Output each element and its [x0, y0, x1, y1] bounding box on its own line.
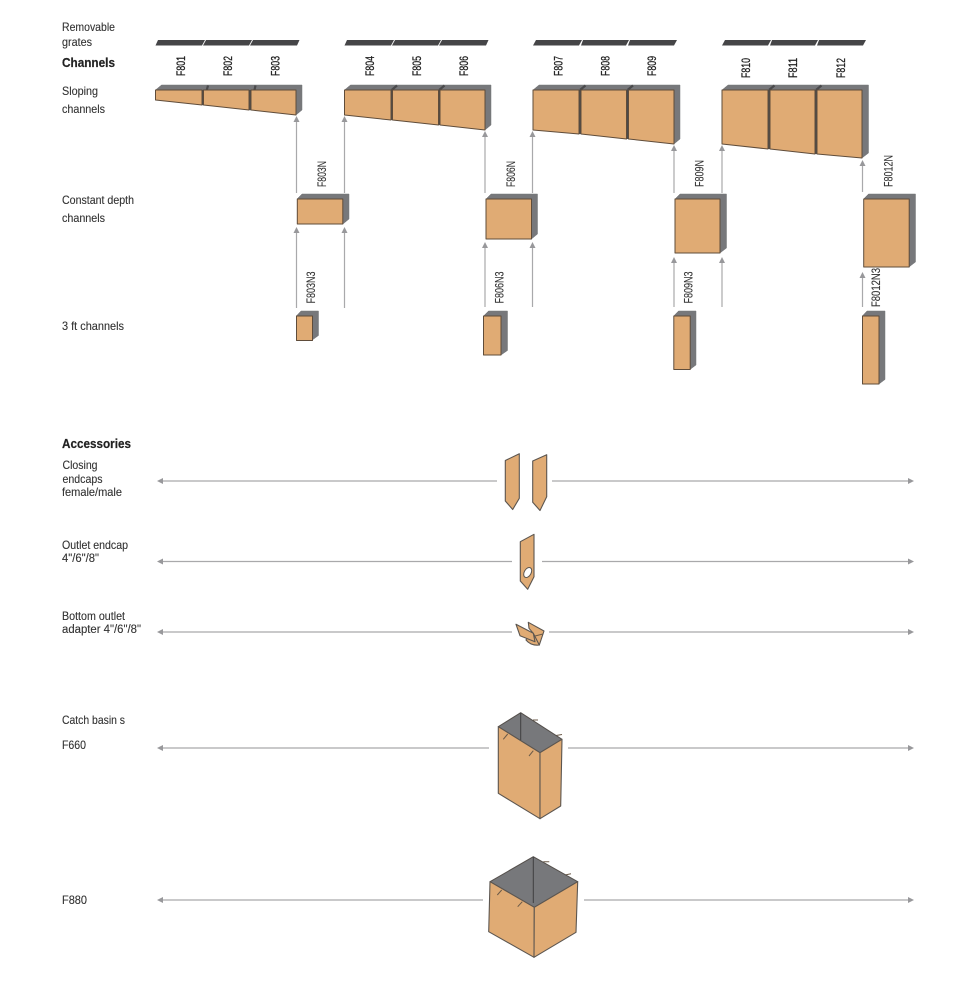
constant depth channel: F8012N: [864, 194, 916, 267]
model labels: F810 to F812: F811: [786, 58, 800, 78]
row label: sloping channels: Sloping: [62, 84, 98, 98]
row label: 3 ft channels: 3 ft channels: [62, 319, 124, 333]
model labels: F810 to F812: F810: [739, 58, 753, 78]
3 ft channel: F8012N3: [862, 311, 885, 384]
arrows: catch basin F660: [157, 745, 914, 751]
model labels: F804 to F806: F804: [363, 56, 377, 76]
label: F803N3: F803N3: [304, 271, 318, 304]
row label: outlet endcap: [62, 538, 128, 565]
label: F8012N: F8012N: [882, 155, 896, 187]
constant depth channel: F803N: [297, 194, 349, 224]
grates: F801 to F803: [156, 40, 300, 46]
sloping channels: F801 to F803: [156, 85, 302, 115]
label: F803N: F803N: [315, 161, 329, 187]
arrows: outlet endcap: [157, 558, 914, 564]
row label: removable grates: [62, 20, 115, 49]
heading: channels: Channels: [62, 55, 115, 70]
icon: outlet endcap: [520, 534, 534, 589]
row label: sloping channels: channels: [62, 102, 105, 116]
label: F809N3: F809N3: [682, 271, 696, 304]
row label: catch basins: Catch basin s: [62, 713, 125, 727]
row label: closing endcaps female/male: [62, 458, 122, 499]
model labels: F801 to F803: [174, 56, 282, 76]
icon: bottom outlet adapter: [516, 622, 544, 645]
icon: catch basin F660: [498, 713, 562, 819]
constant depth channel: F806N: [486, 194, 538, 239]
row label: closing endcaps female/male: Closing: [62, 458, 98, 472]
model labels: F801 to F803: F802: [221, 56, 235, 76]
arrows: sloping to constant depth: [294, 116, 866, 193]
constant depth channel: F809N: [675, 194, 726, 253]
grates: F807 to F809: [533, 40, 677, 46]
sloping channels: F804 to F806: [344, 85, 491, 130]
icon: closing endcaps: [505, 454, 547, 510]
model labels: F807 to F809: [552, 56, 659, 76]
3 ft channel: F803N3: [296, 311, 318, 340]
row label: constant depth channels: channels: [62, 211, 105, 225]
model labels: F810 to F812: F812: [834, 58, 848, 78]
model labels: F804 to F806: [363, 56, 471, 76]
grates: F804 to F806: [344, 40, 488, 46]
label: F8012N3: F8012N3: [869, 268, 883, 307]
3 ft channel: F806N3: [484, 311, 508, 355]
arrows: closing endcaps: [157, 478, 914, 484]
row label: removable grates: Removable: [62, 20, 115, 34]
grates: F810 to F812: [722, 40, 866, 46]
model labels: F807 to F809: F808: [598, 56, 612, 76]
row label: bottom outlet adapter: [62, 609, 141, 636]
row label: outlet endcap: Outlet endcap: [62, 538, 128, 552]
model labels: F804 to F806: F806: [457, 56, 471, 76]
label: F806N: F806N: [504, 161, 518, 187]
label: F809N: F809N: [692, 160, 706, 187]
row label: bottom outlet adapter: adapter 4"/6"/8": [62, 624, 141, 636]
row label: F660: F660: [62, 738, 86, 752]
row label: outlet endcap: 4"/6"/8": [62, 553, 99, 565]
model labels: F807 to F809: F807: [552, 56, 566, 76]
model labels: F807 to F809: F809: [645, 56, 659, 76]
arrows: bottom outlet adapter: [157, 629, 914, 635]
row label: closing endcaps female/male: female/male: [62, 485, 122, 499]
arrows: constant depth to 3 ft: [294, 227, 866, 308]
row label: F880: F880: [62, 893, 87, 907]
sloping channels: F810 to F812: [722, 85, 868, 158]
label: F806N3: F806N3: [492, 271, 506, 304]
model labels: F804 to F806: F805: [410, 56, 424, 76]
row label: constant depth channels: [62, 193, 134, 225]
3 ft channel: F809N3: [674, 311, 696, 370]
icon: catch basin F880: [489, 857, 578, 957]
arrows: catch basin F880: [157, 897, 914, 903]
model labels: F810 to F812: [739, 58, 848, 78]
row label: bottom outlet adapter: Bottom outlet: [62, 609, 126, 623]
sloping channels: F807 to F809: [533, 85, 680, 144]
row label: removable grates: grates: [62, 35, 92, 49]
row label: closing endcaps female/male: endcaps: [62, 472, 102, 486]
row label: sloping channels: [62, 84, 105, 116]
row label: constant depth channels: Constant depth: [62, 193, 134, 207]
heading: accessories: Accessories: [62, 436, 131, 451]
model labels: F801 to F803: F801: [174, 56, 188, 76]
model labels: F801 to F803: F803: [268, 56, 282, 76]
